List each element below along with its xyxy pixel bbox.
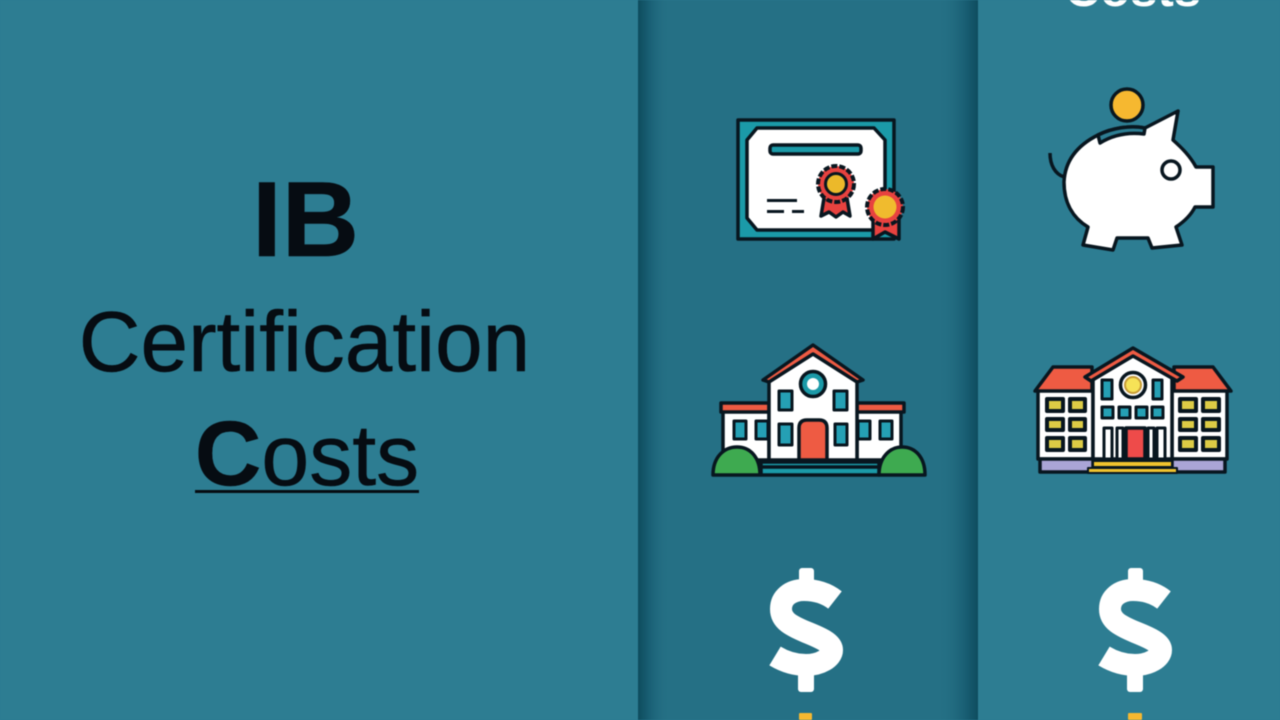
title line: IB: IB [252,159,359,279]
title line: Costs: Costs [195,403,419,505]
icon: cropped yellow mark, middle column [799,713,812,720]
panel: left title background [0,0,638,720]
icon: certificate with rosettes [738,120,903,239]
icon: dollar sign, right column [1104,568,1164,692]
icon: dollar sign, middle column [775,568,835,692]
title: IB Certification Costs [79,159,530,505]
icon: piggy bank with coin [1050,89,1213,250]
panel: right column background [978,0,1280,720]
icon: small school building [713,345,925,475]
title underline [195,490,419,493]
icon: cropped yellow mark, right column [1128,713,1142,720]
icon: large school building [1035,348,1231,473]
title line: Certification: Certification [79,295,530,390]
panel: middle column [638,0,978,720]
